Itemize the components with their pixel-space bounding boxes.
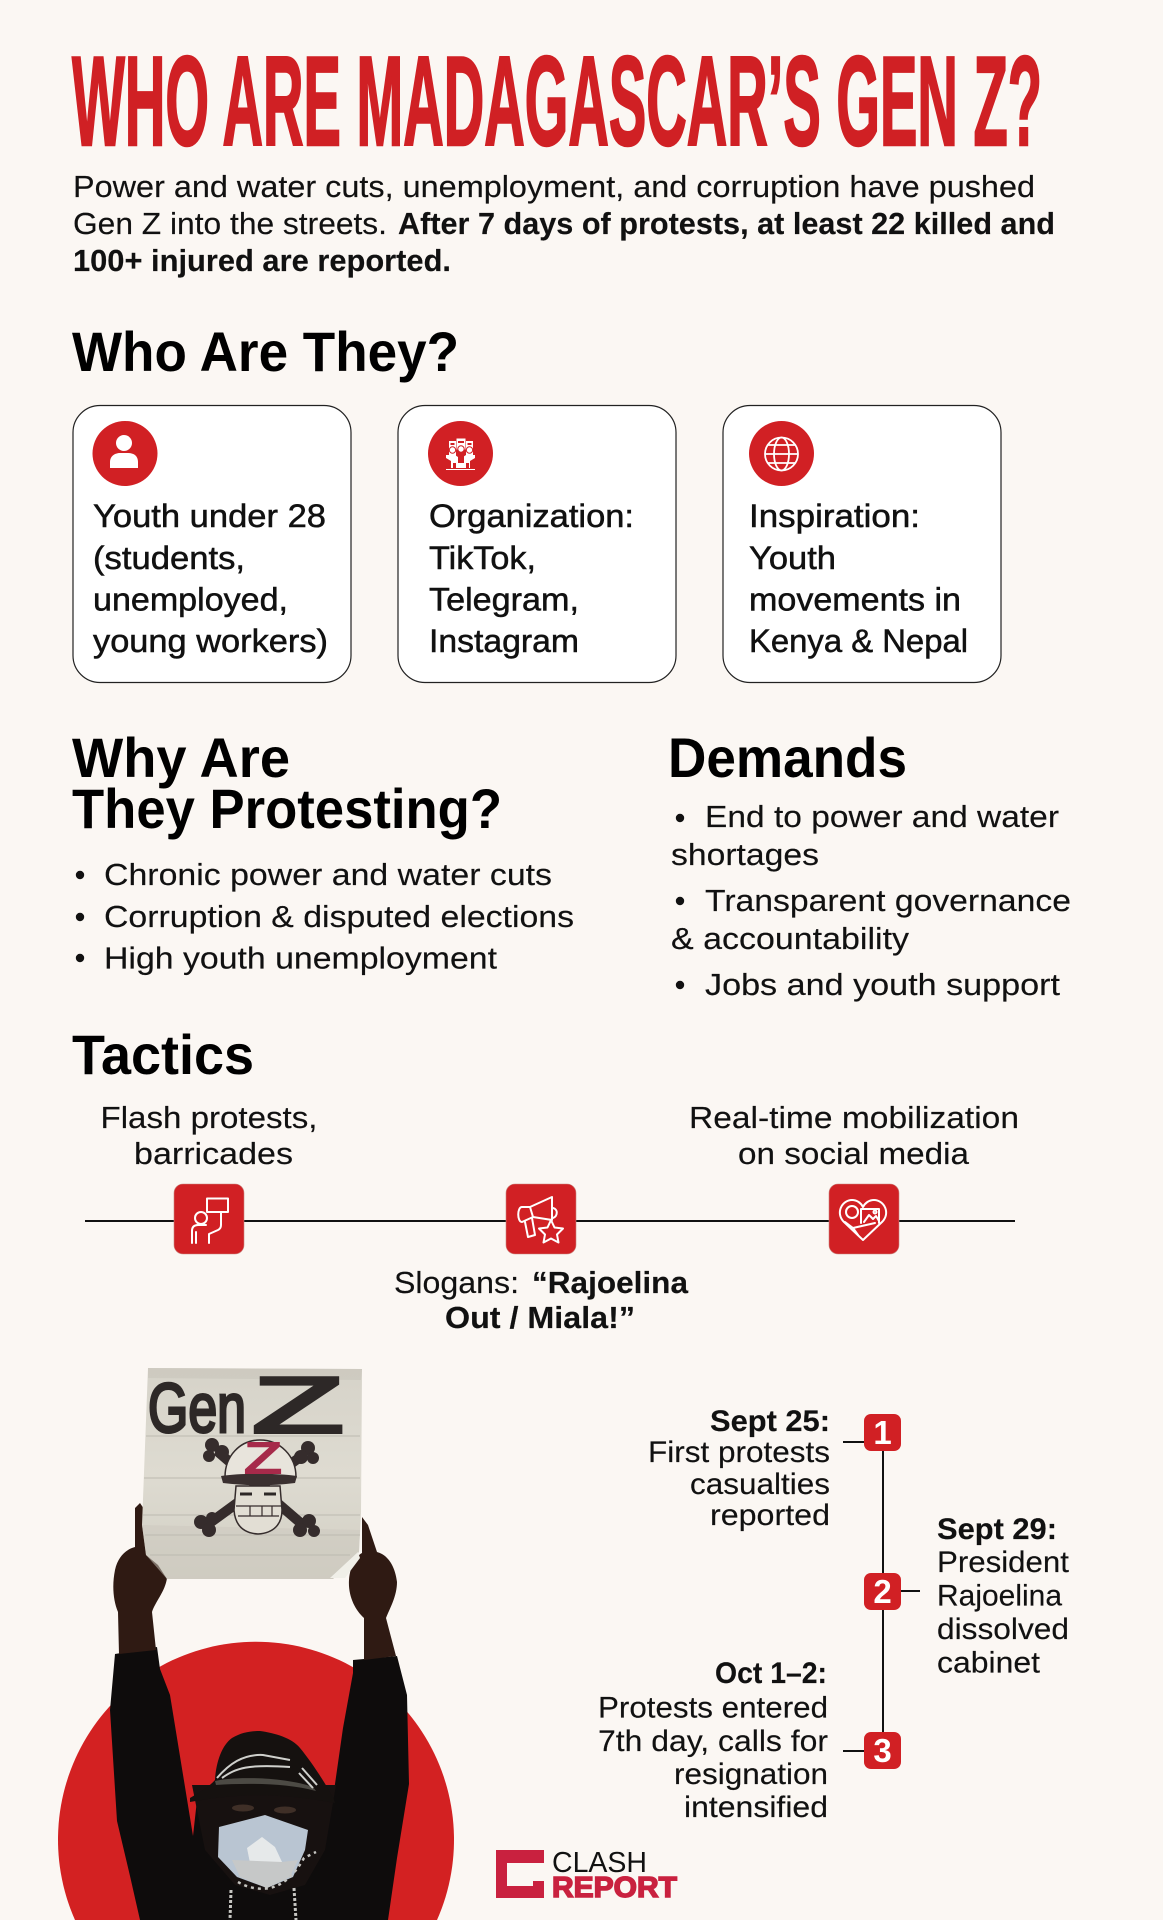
event 3 marker xyxy=(864,1732,901,1769)
panel: youth card: Youth under 28 xyxy=(93,498,326,534)
panel: youth card xyxy=(73,406,351,682)
logo: Clash Report xyxy=(496,1847,677,1904)
event 3 text xyxy=(598,1657,828,1824)
red circle xyxy=(58,1642,454,1920)
label: flash protests: Flash protests, xyxy=(100,1100,318,1135)
event 1 text: First protests xyxy=(648,1436,830,1469)
panel: organization card: Organization: xyxy=(429,498,634,534)
event 1 marker: 1 xyxy=(873,1414,892,1451)
label: slogans: Slogans: xyxy=(394,1265,519,1300)
event 2 text: Sept 29: xyxy=(937,1513,1057,1546)
icon: organization xyxy=(428,421,493,486)
list: demands: & accountability xyxy=(671,921,910,956)
list: demands: Transparent governance xyxy=(705,883,1071,918)
sign board xyxy=(142,1358,362,1579)
list: reasons for protest: High youth unemployment xyxy=(104,940,497,976)
panel: inspiration card xyxy=(723,406,1001,682)
list: reasons for protest: Corruption & disputed elections xyxy=(104,899,574,934)
label: slogans: “Rajoelina xyxy=(532,1265,689,1300)
label: slogans: Out / Miala!” xyxy=(445,1300,635,1335)
intro text block: Power and water cuts, unemployment, and corruption have pushed xyxy=(73,169,1035,204)
heading: why are they protesting xyxy=(72,726,502,840)
label: real-time mobilization: Real-time mobilization xyxy=(689,1100,1019,1135)
event 1 text xyxy=(648,1405,830,1532)
event 3 marker: 3 xyxy=(873,1732,892,1769)
intro text block xyxy=(73,169,1055,278)
icon: protester with sign xyxy=(174,1184,244,1254)
event 2 marker xyxy=(864,1573,901,1610)
sign board: Z xyxy=(243,1432,283,1484)
logo: Clash Report: CLASH xyxy=(552,1847,647,1879)
event 2 text: Rajoelina xyxy=(937,1580,1062,1612)
event 3 text: 7th day, calls for xyxy=(598,1725,828,1758)
face xyxy=(192,1785,336,1895)
event 2 text: cabinet xyxy=(937,1646,1041,1680)
intro text block: Gen Z into the streets. xyxy=(73,206,387,241)
tactics diagram xyxy=(85,1100,1019,1335)
face mask xyxy=(218,1815,308,1888)
icon: globe xyxy=(749,421,814,486)
skull xyxy=(234,1486,282,1534)
panel: organization card: Instagram xyxy=(429,623,579,659)
label: real-time mobilization xyxy=(689,1100,1019,1171)
panel: inspiration card: Kenya & Nepal xyxy=(749,623,968,659)
panel: organization card xyxy=(398,406,676,682)
list: demands: End to power and water xyxy=(705,799,1059,834)
torso and sleeves xyxy=(110,1647,409,1920)
intro text block: 100+ injured are reported. xyxy=(73,243,451,278)
forearms and hands xyxy=(113,1503,397,1660)
event 3 text: resignation xyxy=(674,1758,828,1791)
sign board: Z xyxy=(249,1358,347,1452)
event 3 text: intensified xyxy=(684,1791,828,1824)
event 1 marker xyxy=(864,1414,901,1451)
panel: youth card: young workers) xyxy=(93,623,328,659)
heading: who are they: Who Are They? xyxy=(72,320,459,383)
heading: tactics: Tactics xyxy=(72,1023,254,1086)
event 3 text: Oct 1–2: xyxy=(715,1657,827,1690)
list: reasons for protest xyxy=(76,857,574,976)
panel: inspiration card: movements in xyxy=(749,582,961,618)
crossbones xyxy=(194,1438,320,1537)
panel: inspiration card: Inspiration: xyxy=(749,498,920,534)
event 3 text: Protests entered xyxy=(598,1692,828,1724)
intro text block: After 7 days of protests, at least 22 killed and xyxy=(398,206,1055,241)
necklace xyxy=(230,1852,316,1920)
list: demands: Jobs and youth support xyxy=(705,967,1060,1002)
heading: why are they protesting: Why Are xyxy=(72,726,290,789)
icon: person xyxy=(92,421,158,486)
list: demands: shortages xyxy=(671,837,819,872)
panel: organization card: TikTok, xyxy=(429,540,536,576)
helmet xyxy=(225,1440,296,1477)
panel: inspiration card: Youth xyxy=(749,540,836,576)
photo: protester with Gen Z sign on red circle xyxy=(58,1358,454,1920)
event 2 text xyxy=(937,1513,1070,1680)
label: slogans xyxy=(394,1265,689,1335)
sign lettering: Gen xyxy=(148,1369,246,1447)
label: flash protests xyxy=(100,1100,318,1171)
label: flash protests: barricades xyxy=(134,1136,293,1171)
event 1 text: Sept 25: xyxy=(710,1405,830,1438)
timeline xyxy=(598,1405,1070,1824)
icon: megaphone and star xyxy=(506,1184,576,1254)
panel: youth card: (students, xyxy=(93,540,245,576)
heading: demands: Demands xyxy=(668,726,907,789)
event 2 text: dissolved xyxy=(937,1613,1069,1646)
logo: Clash Report: REPORT xyxy=(552,1872,677,1904)
panel: organization card: Telegram, xyxy=(429,582,579,618)
event 2 marker: 2 xyxy=(873,1573,892,1610)
panel: youth card: unemployed, xyxy=(93,582,288,618)
list: demands xyxy=(671,799,1071,1002)
label: real-time mobilization: on social media xyxy=(738,1136,970,1171)
event 2 text: President xyxy=(937,1546,1070,1579)
list: reasons for protest: Chronic power and water cuts xyxy=(104,857,552,892)
event 1 text: casualties xyxy=(690,1468,830,1501)
heading: why are they protesting: They Protesting? xyxy=(72,777,502,840)
icon: heart with picture xyxy=(829,1184,899,1254)
eyes xyxy=(232,1804,296,1814)
event 1 text: reported xyxy=(710,1499,830,1532)
hat xyxy=(190,1731,335,1803)
